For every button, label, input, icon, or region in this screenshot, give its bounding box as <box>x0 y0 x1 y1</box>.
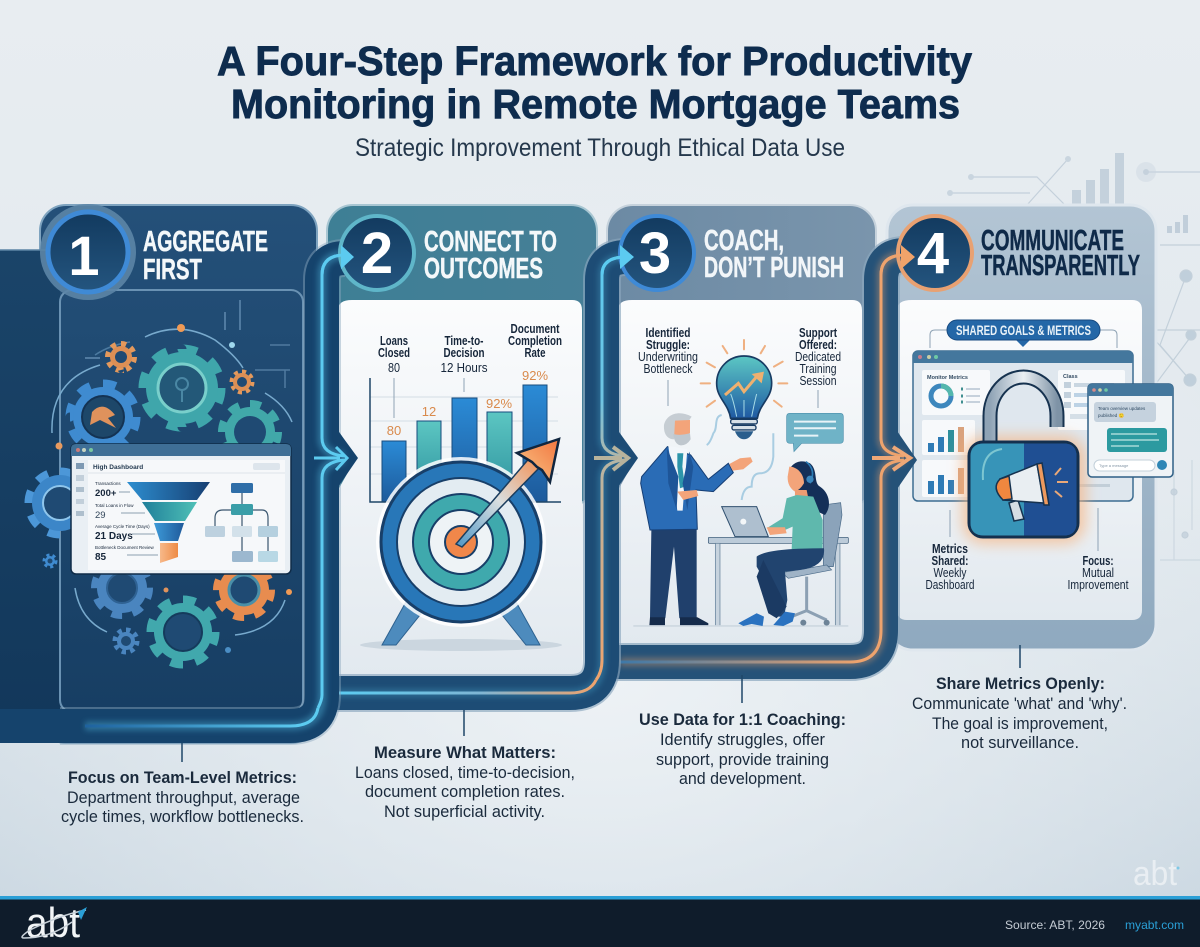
heading: aggregate first: AGGREGATE <box>143 226 268 258</box>
gear: tiny blue <box>44 555 56 567</box>
gears illustration <box>29 300 292 664</box>
connector 3: orange line to step 4 <box>610 255 917 662</box>
label: document completion: Document <box>510 321 560 336</box>
caption: step 3: and development. <box>679 769 806 788</box>
gear: lower orange <box>217 563 271 617</box>
label: focus <box>1068 508 1129 592</box>
label: document completion: Completion <box>508 333 562 348</box>
coaching illustration <box>633 340 848 626</box>
label: focus: Focus: <box>1082 553 1114 568</box>
caption: step 3 <box>639 675 846 788</box>
label: support offered: Dedicated <box>795 349 841 364</box>
title <box>217 38 972 127</box>
label: metrics shared <box>926 510 974 592</box>
heading: coach, don't punish: DON’T PUNISH <box>704 252 844 284</box>
bar chart: 80 <box>387 423 401 438</box>
label: focus: Improvement <box>1068 577 1129 592</box>
label: support offered: Support <box>799 325 838 340</box>
gear: blue with tool <box>70 384 136 450</box>
heading: connect to outcomes: CONNECT TO <box>424 226 557 258</box>
source credit: Source: ABT, 2026 <box>1005 918 1105 932</box>
panel 2: connect to outcomes <box>327 205 597 678</box>
label: time to decision <box>440 333 488 375</box>
chat window: Team overview updates <box>1098 406 1146 411</box>
left band <box>0 250 60 743</box>
label: identified struggle <box>638 325 698 406</box>
label: time to decision: Time-to- <box>444 333 484 348</box>
chat window: Type a message <box>1099 463 1129 468</box>
gear: lower blue <box>95 561 149 615</box>
dashboard metrics: Transactions <box>95 481 121 486</box>
caption: step 2: Not superficial activity. <box>384 802 545 821</box>
step 2 badge: 2 <box>361 221 393 286</box>
caption: step 1: Department throughput, average <box>67 788 300 807</box>
metrics dashboard window: Monitor Metrics <box>927 375 968 381</box>
dashboard metrics: 85 <box>95 552 107 563</box>
step 4 badge: 4 <box>917 221 949 286</box>
icon: target with arrow <box>360 439 562 651</box>
website: myabt.com <box>1125 918 1184 932</box>
dashboard metrics: 29 <box>95 510 106 521</box>
label: support offered: Offered: <box>799 337 837 352</box>
dashboard metrics: Total Loans in Flow <box>95 503 134 508</box>
bar chart: 92% <box>522 368 548 383</box>
caption: step 3: Identify struggles, offer <box>660 730 825 749</box>
caption: step 4: The goal is improvement, <box>932 714 1108 733</box>
gear: small lower blue <box>115 630 137 652</box>
figure: employee on headset <box>738 461 842 626</box>
label: support offered: Session <box>800 373 836 388</box>
metrics dashboard window: Class <box>1063 374 1078 380</box>
caption: step 2: Measure What Matters: <box>374 743 556 762</box>
dashboard metrics <box>95 481 158 563</box>
label: loans closed: Closed <box>378 345 410 360</box>
dashboard metrics: 200+ <box>95 488 117 499</box>
title: Monitoring in Remote Mortgage Teams <box>231 81 960 127</box>
gear: small orange <box>108 344 134 370</box>
footer logo: abt <box>26 899 80 946</box>
label: time to decision: 12 Hours <box>440 360 488 375</box>
label: identified struggle: Identified <box>646 325 691 340</box>
label: loans closed: Loans <box>380 333 408 348</box>
footer bar <box>0 896 1200 947</box>
label: loans closed <box>378 333 410 375</box>
label: support offered <box>795 325 841 408</box>
heading: communicate transparently: COMMUNICATE <box>981 225 1124 257</box>
icon: light bulb <box>701 340 787 439</box>
heading: connect to outcomes: OUTCOMES <box>424 253 543 285</box>
dashboard metrics: 21 Days <box>95 531 133 542</box>
entry arrows into the step badges <box>322 245 915 275</box>
connector 2: line to step 3 <box>325 257 638 693</box>
metrics dashboard window <box>913 351 1133 501</box>
caption: step 2: document completion rates. <box>365 782 565 801</box>
flowchart <box>205 483 278 562</box>
label: metrics shared: Shared: <box>932 553 968 568</box>
label: loans closed: 80 <box>388 360 400 375</box>
panel 3: coach, don't punish <box>607 205 876 645</box>
label: focus: Mutual <box>1082 565 1114 580</box>
bar chart: 92% <box>486 396 512 411</box>
chat window: published 🙂 <box>1098 413 1125 418</box>
panel 1: aggregate first <box>0 205 317 743</box>
gear: large teal <box>143 349 221 427</box>
step 1 badge: 1 <box>68 224 100 287</box>
heading: connect to outcomes <box>424 226 557 285</box>
step 1 badge <box>40 204 136 300</box>
gear: teal right <box>222 404 278 460</box>
caption: step 4: Communicate 'what' and 'why'. <box>912 694 1127 713</box>
icon: megaphone <box>996 463 1068 521</box>
title: A Four-Step Framework for Productivity <box>217 38 972 84</box>
figure: manager <box>641 413 753 626</box>
step 3 badge: 3 <box>639 221 671 286</box>
chat window <box>1088 384 1173 477</box>
dashboard metrics: Average Cycle Time (Days) <box>95 524 150 529</box>
caption: step 1 <box>61 743 304 826</box>
step 2 badge <box>340 216 414 290</box>
heading: aggregate first <box>143 226 268 286</box>
caption: step 4 <box>912 645 1127 752</box>
open padlock with megaphone <box>962 377 1086 544</box>
heading: coach, don't punish <box>704 225 844 284</box>
card 3 <box>618 300 862 645</box>
card 4 <box>897 300 1142 620</box>
label: identified struggle: Bottleneck <box>644 361 693 376</box>
card 2 <box>338 300 582 678</box>
caption: step 1: Focus on Team-Level Metrics: <box>68 768 297 787</box>
gear: left blue <box>29 472 91 534</box>
label: time to decision: Decision <box>444 345 485 360</box>
dashboard window: High Dashboard <box>93 464 143 471</box>
dashboard window <box>71 444 291 574</box>
gear: small orange right <box>232 372 252 392</box>
label: support offered: Training <box>800 361 836 376</box>
decorative arcs <box>52 300 292 653</box>
label: metrics shared: Weekly <box>934 565 967 580</box>
shared goals badge: SHARED GOALS & METRICS <box>956 322 1091 338</box>
subtitle: Strategic Improvement Through Ethical Data Use <box>355 134 845 162</box>
caption: step 4: Share Metrics Openly: <box>936 674 1105 693</box>
label: metrics shared: Metrics <box>932 541 968 556</box>
label: identified struggle: Struggle: <box>646 337 690 352</box>
connector 1: cyan line to step 2 <box>0 255 358 726</box>
caption: step 3: Use Data for 1:1 Coaching: <box>639 710 846 729</box>
caption: step 1: cycle times, workflow bottlenecks. <box>61 807 304 826</box>
heading: communicate transparently <box>981 225 1140 282</box>
label: identified struggle: Underwriting <box>638 349 698 364</box>
caption: step 2 <box>355 710 575 821</box>
caption: step 4: not surveillance. <box>961 733 1079 752</box>
caption: step 3: support, provide training <box>656 750 829 769</box>
gear: lower teal <box>151 600 215 664</box>
background network decoration <box>947 153 1200 560</box>
icon: speech bubble <box>787 413 843 452</box>
caption: step 2: Loans closed, time-to-decision, <box>355 763 575 782</box>
step 3 badge <box>620 216 694 290</box>
panel 4: communicate transparently <box>887 205 1173 650</box>
label: metrics shared: Dashboard <box>926 577 974 592</box>
label: document completion: Rate <box>524 345 546 360</box>
bar chart: 12 <box>422 404 436 419</box>
label: document completion <box>508 321 562 360</box>
dashboard metrics: Bottleneck Document Review <box>95 545 155 550</box>
figure: laptop and desk <box>633 507 848 626</box>
funnel chart <box>127 482 210 563</box>
heading: aggregate first: FIRST <box>143 254 202 286</box>
watermark logo: abt <box>1133 855 1178 893</box>
shared goals badge <box>930 320 1117 348</box>
squiggles <box>707 415 773 500</box>
step 4 badge <box>898 216 972 290</box>
heading: coach, don't punish: COACH, <box>704 225 784 257</box>
bar chart <box>370 368 561 502</box>
